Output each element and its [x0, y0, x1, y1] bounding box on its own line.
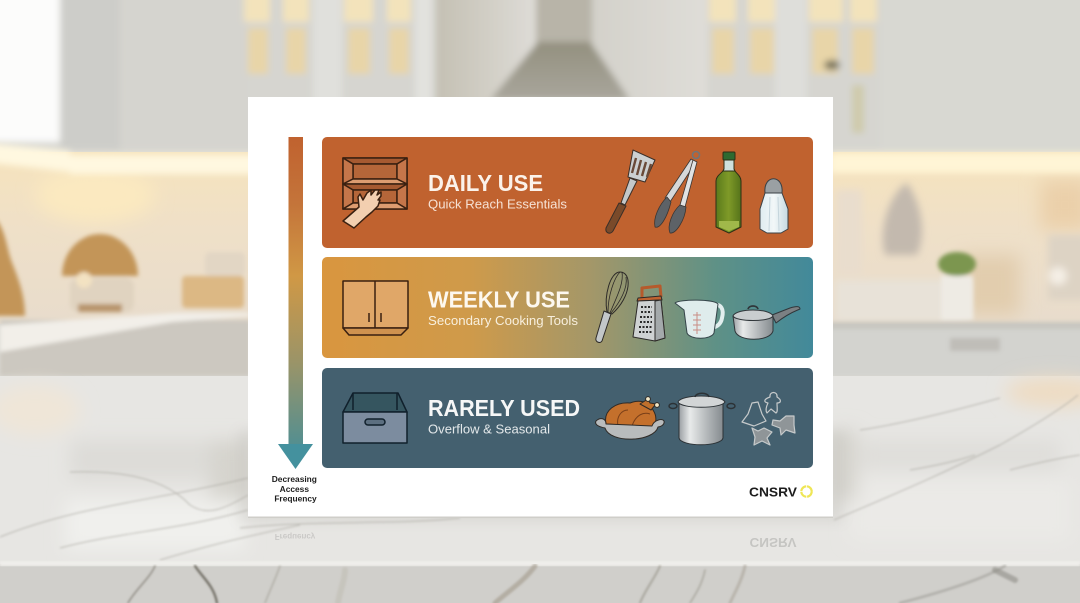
subheading: overflow and seasonal: Overflow & Seasonal [428, 422, 550, 436]
reflection of the card [275, 532, 797, 550]
panel: daily use [322, 137, 813, 248]
arrow caption: Frequency [274, 494, 317, 504]
icon: tongs [655, 152, 700, 233]
heading: rarely used: RARELY USED [428, 395, 580, 421]
icon: stock pot [669, 393, 735, 445]
reflection of the card: CNSRV [750, 535, 797, 550]
heading: weekly use: WEEKLY USE [428, 286, 570, 312]
panel: rarely used [322, 368, 813, 468]
icon: open shelf with hand [343, 158, 407, 228]
reflection of the card: Frequency [275, 532, 316, 541]
decor right [835, 183, 1080, 322]
icon: box grater [633, 286, 665, 341]
subheading: quick reach essentials: Quick Reach Essentials [428, 198, 567, 212]
arrow: decreasing access frequency [278, 137, 313, 469]
back counter [0, 313, 1080, 376]
icon: spatula [606, 150, 655, 233]
card shadow [238, 430, 843, 522]
logo: CNSRV [749, 484, 797, 500]
icon: salt shaker [760, 179, 788, 233]
under cabinet light strips [0, 143, 1080, 174]
infographic card [248, 97, 833, 518]
icon: measuring cup [675, 300, 723, 338]
panel: weekly use [322, 257, 813, 358]
arrow caption: Decreasing [272, 474, 317, 484]
marble front edge [0, 561, 1080, 603]
decor left [0, 218, 245, 316]
arrow caption: Access [280, 484, 309, 494]
subheading: secondary cooking tools: Secondary Cooking Tools [428, 314, 578, 328]
icon: whisk [596, 272, 628, 342]
wall [0, 152, 1080, 324]
icon: wall cabinet [343, 281, 408, 335]
marble counter top [0, 376, 1080, 564]
heading: daily use: DAILY USE [428, 170, 543, 196]
icon: roast turkey [596, 397, 664, 439]
icon: olive oil bottle [716, 152, 741, 233]
icon: saucepan [733, 306, 800, 339]
icon: cookie cutters [742, 392, 795, 445]
icon: storage bin [343, 393, 407, 443]
